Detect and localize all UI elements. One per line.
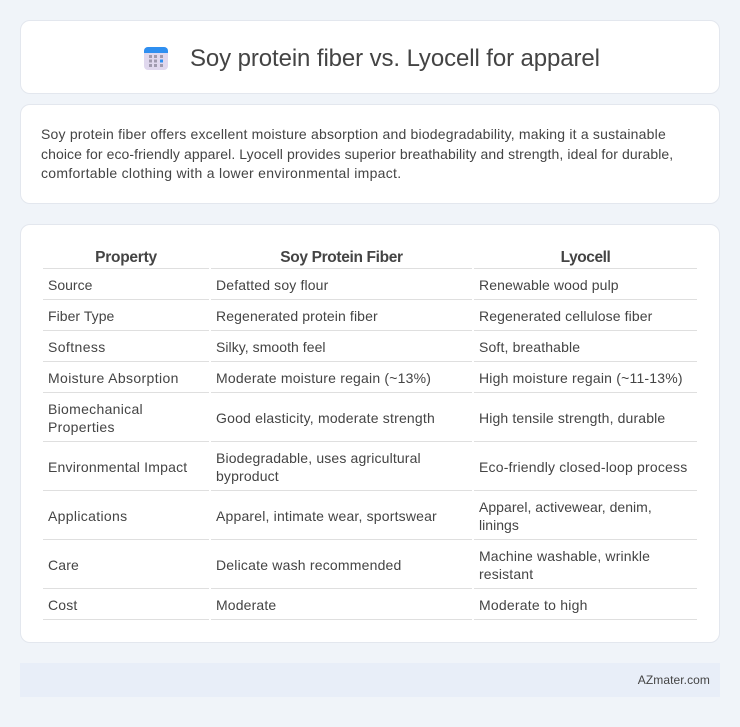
row: Cost: Cost: [48, 597, 77, 613]
table header: [95, 249, 610, 266]
intro panel: [20, 104, 720, 204]
row: Cost: [48, 597, 588, 613]
row: Care: Care: [48, 557, 79, 573]
row: Fiber Type: [48, 308, 652, 324]
row: Biomechanical Properties: Biomechanical: [48, 401, 143, 417]
row: Care: resistant: [479, 566, 533, 582]
row: Environmental Impact: Eco-friendly closed-loop process: [479, 459, 687, 475]
row: Moisture Absorption: Moisture Absorption: [48, 370, 179, 386]
intro text: Soy protein fiber offers excellent moisture absorption and biodegradability, making it a sustainable: [41, 126, 666, 142]
row: Fiber Type: Fiber Type: [48, 308, 114, 324]
row: Source: Defatted soy flour: [216, 277, 328, 293]
row: Cost: Moderate: [216, 597, 276, 613]
row: Cost: Moderate to high: [479, 597, 588, 613]
row: Softness: [48, 339, 580, 355]
row: Applications: Apparel, activewear, denim,: [479, 499, 652, 515]
row: Applications: Apparel, intimate wear, sportswear: [216, 508, 437, 524]
row: Moisture Absorption: Moderate moisture regain (~13%): [216, 370, 431, 386]
row: Biomechanical Properties: High tensile strength, durable: [479, 410, 665, 426]
row: Moisture Absorption: High moisture regain (~11-13%): [479, 370, 683, 386]
row: Biomechanical Properties: Good elasticity, moderate strength: [216, 410, 435, 426]
row: Care: Machine washable, wrinkle: [479, 548, 650, 564]
row: Environmental Impact: [48, 450, 687, 484]
row: Care: [48, 548, 650, 582]
row: Environmental Impact: Environmental Impact: [48, 459, 187, 475]
comparison table panel: [20, 224, 720, 643]
row: Source: Renewable wood pulp: [479, 277, 619, 293]
row: Fiber Type: Regenerated cellulose fiber: [479, 308, 652, 324]
row: Applications: linings: [479, 517, 519, 533]
row: Biomechanical Properties: [48, 401, 665, 435]
table header: Lyocell: [561, 249, 610, 266]
row: Softness: Softness: [48, 339, 106, 355]
header panel: [20, 20, 720, 94]
footer credit: AZmater.com: [638, 673, 710, 687]
row: Softness: Soft, breathable: [479, 339, 580, 355]
row: Environmental Impact: byproduct: [216, 468, 279, 484]
row: Moisture Absorption: [48, 370, 683, 386]
row: Care: Delicate wash recommended: [216, 557, 402, 573]
row: Applications: [48, 499, 652, 533]
title: Soy protein fiber vs. Lyocell for apparel: [190, 45, 600, 72]
row: Biomechanical Properties: Properties: [48, 419, 115, 435]
table header: Property: [95, 249, 157, 266]
row: Applications: Applications: [48, 508, 127, 524]
row: Environmental Impact: Biodegradable, uses agricultural: [216, 450, 421, 466]
footer bar: [20, 663, 720, 697]
icon: calendar: [144, 47, 168, 70]
intro text: choice for eco-friendly apparel. Lyocell provides superior breathability and strength, ideal for durable,: [41, 146, 673, 162]
intro text: [41, 126, 673, 181]
row: Fiber Type: Regenerated protein fiber: [216, 308, 378, 324]
row: Source: [48, 277, 619, 293]
intro text: comfortable clothing with a lower environmental impact.: [41, 165, 401, 181]
row: Source: Source: [48, 277, 92, 293]
table header: Soy Protein Fiber: [280, 249, 403, 266]
row: Softness: Silky, smooth feel: [216, 339, 326, 355]
